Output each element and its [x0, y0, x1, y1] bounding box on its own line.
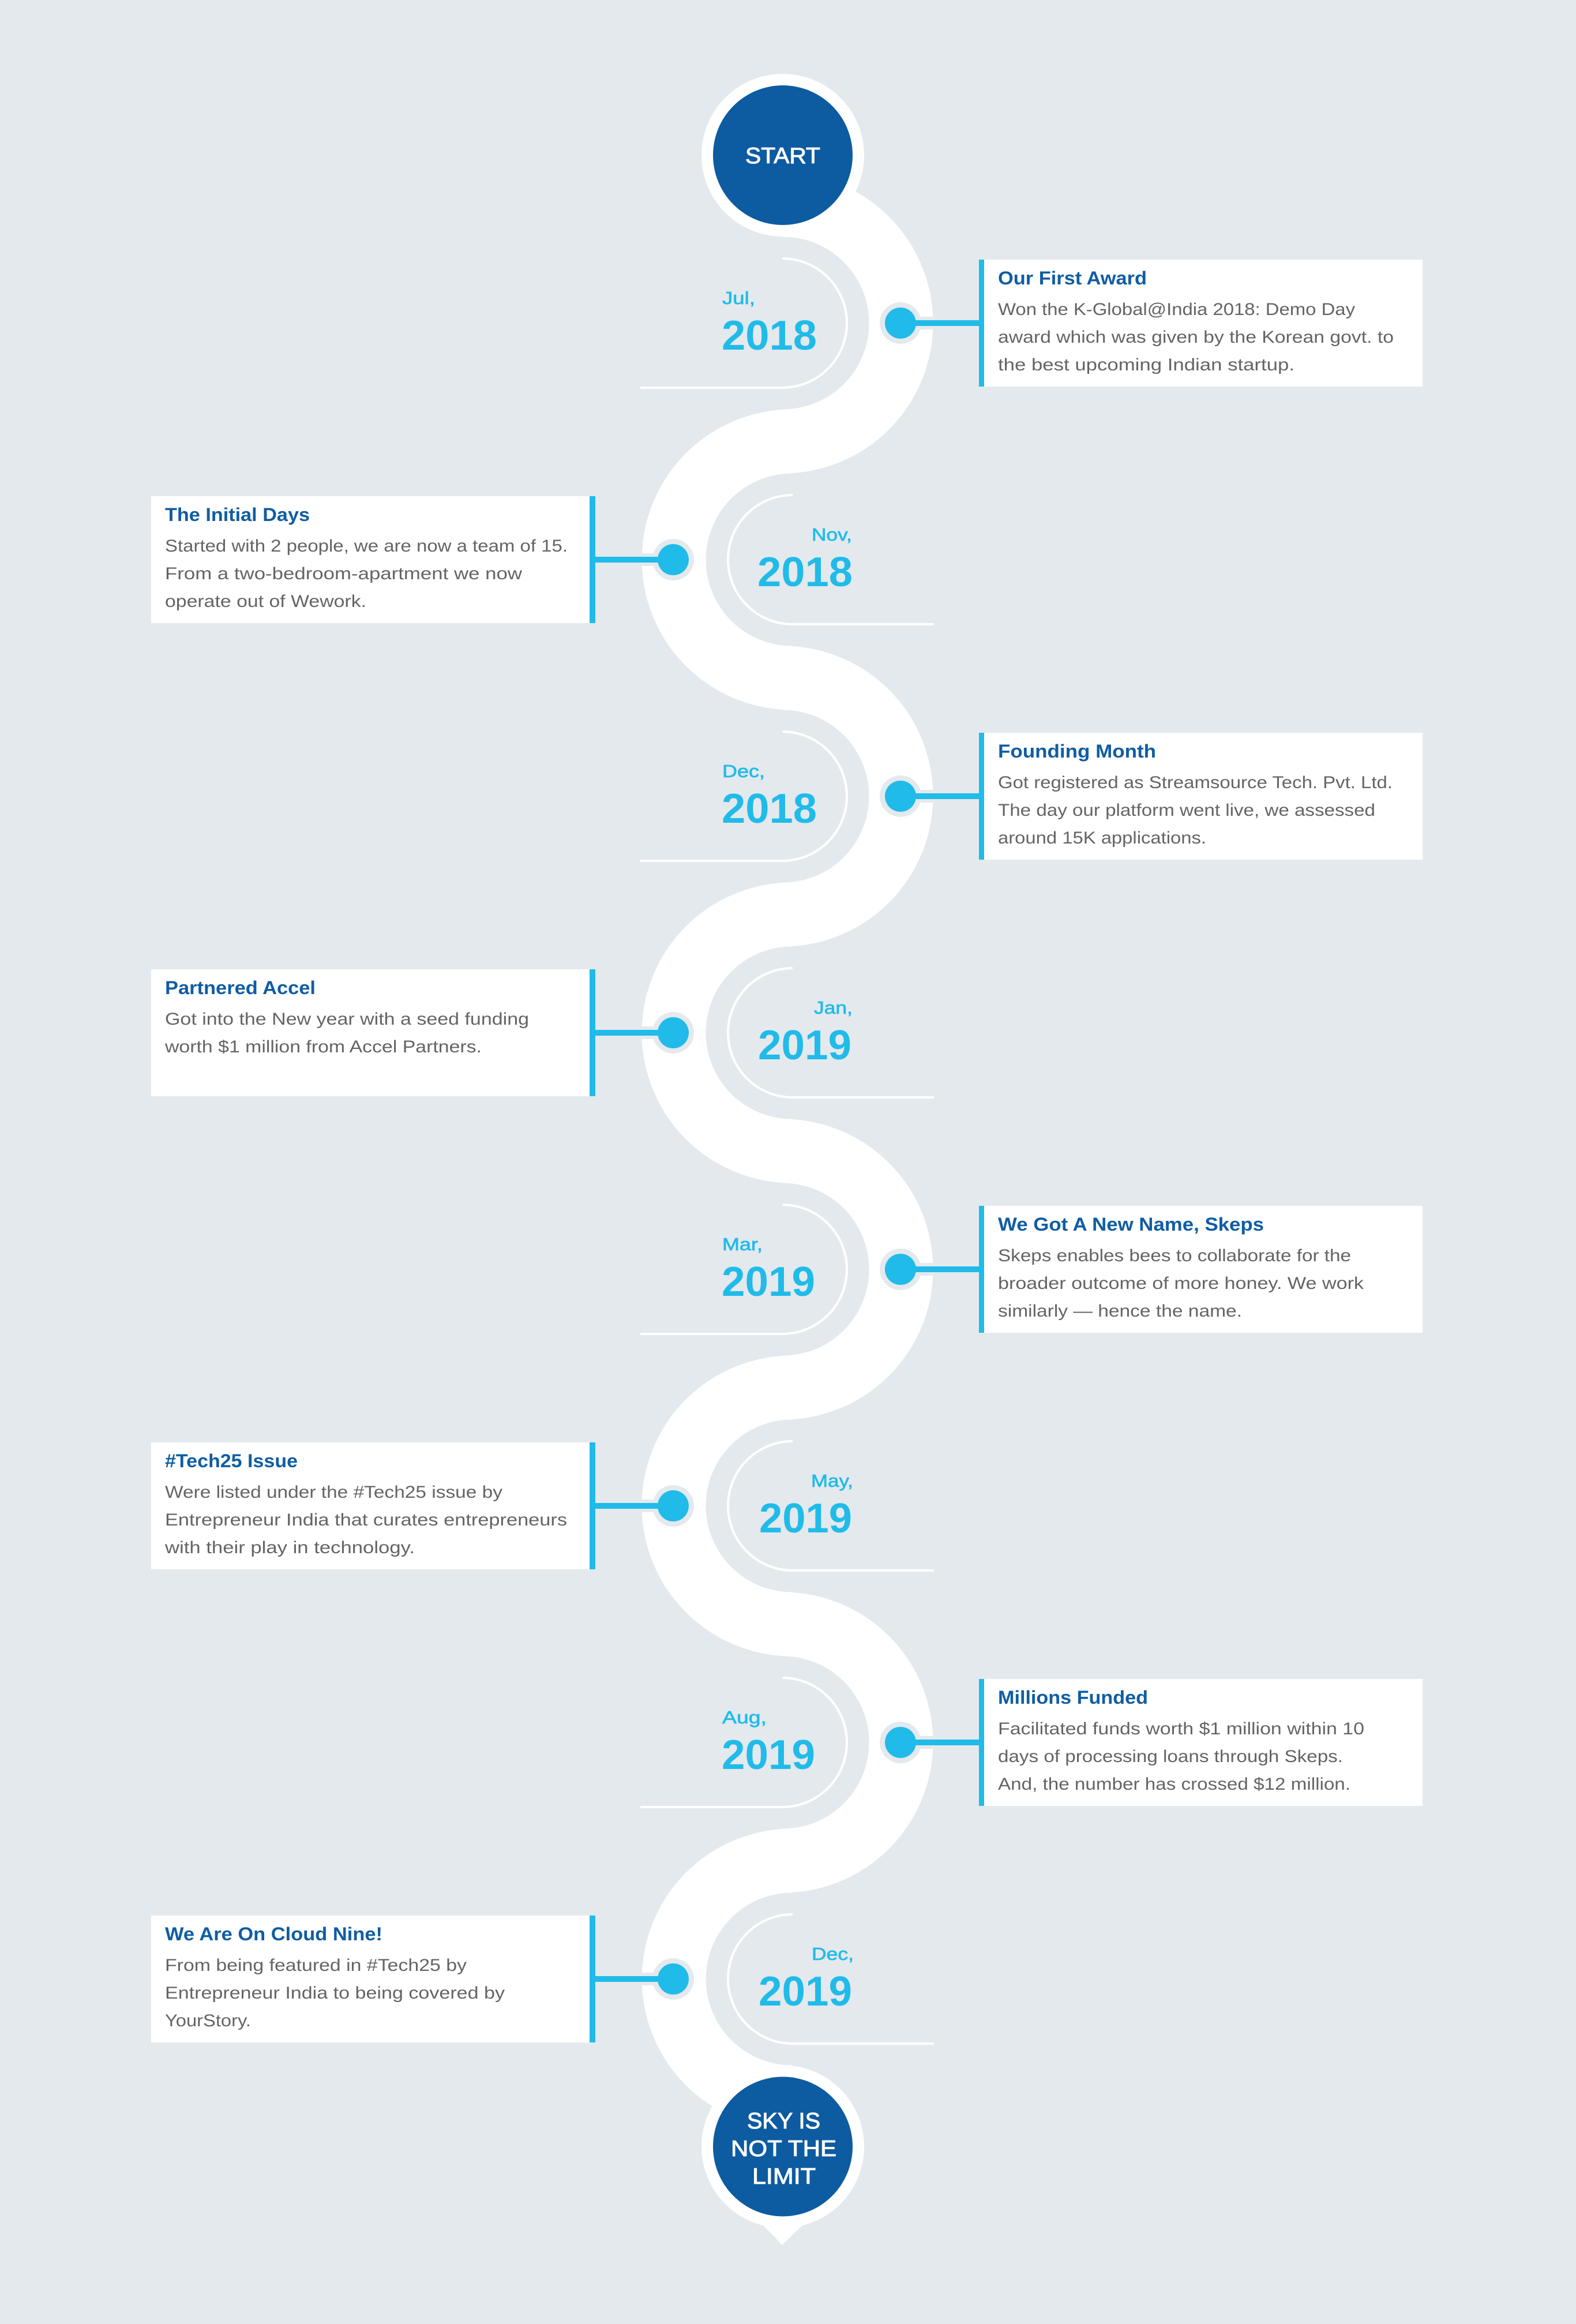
card: Millions Funded: Facilitated funds worth $1 million within 10	[998, 1719, 1364, 1738]
card: Partnered Accel: Got into the New year with a seed funding	[165, 1010, 529, 1029]
date: Nov, 2018: Nov,	[812, 524, 852, 545]
date: May, 2019	[759, 1471, 853, 1542]
dot and connector	[593, 1958, 694, 2000]
date: Jul, 2018: Jul,	[722, 288, 755, 308]
card: We Are On Cloud Nine!: YourStory.	[165, 2011, 251, 2030]
card: Our First Award: award which was given by the Korean govt. to	[998, 328, 1394, 347]
card: Partnered Accel: Partnered Accel	[165, 977, 316, 998]
date arc	[728, 1914, 934, 2044]
milestone 7: Aug 2019, Millions Funded	[640, 1678, 1423, 1807]
end node: pin with tail: SKY IS	[747, 2109, 820, 2134]
dot and connector	[880, 302, 981, 344]
date: Aug, 2019: Aug,	[722, 1707, 767, 1727]
card: We Are On Cloud Nine!: We Are On Cloud Nine!	[165, 1924, 382, 1944]
date: Jan, 2019: Jan,	[814, 998, 853, 1018]
card: The Initial Days	[151, 496, 595, 623]
card: Founding Month: Got registered as Streamsource Tech. Pvt. Ltd.	[998, 773, 1393, 792]
card: We Got A New Name, Skeps: Skeps enables bees to collaborate for the	[998, 1246, 1351, 1265]
dot and connector	[880, 1722, 981, 1763]
start node	[701, 74, 864, 237]
date: Nov, 2018	[757, 524, 853, 595]
card: #Tech25 Issue: #Tech25 Issue	[165, 1450, 298, 1471]
date: Dec, 2018	[722, 761, 817, 832]
milestone 8: Dec 2019, We Are On Cloud Nine	[151, 1914, 934, 2044]
end node: pin with tail	[701, 2066, 864, 2245]
date: Dec, 2019: Dec,	[812, 1944, 854, 1964]
dot and connector	[593, 539, 694, 580]
card: We Are On Cloud Nine!: Entrepreneur India to being covered by	[165, 1984, 505, 2003]
end node: pin with tail: LIMIT	[752, 2164, 816, 2189]
date arc	[640, 1205, 847, 1334]
card: Millions Funded: And, the number has crossed $12 million.	[998, 1775, 1350, 1794]
date arc	[640, 1678, 847, 1807]
date: Dec, 2018: 2018	[722, 786, 817, 832]
date: May, 2019: 2019	[759, 1495, 852, 1542]
date: Aug, 2019	[722, 1707, 815, 1778]
milestone 3: Dec 2018, Founding Month	[640, 732, 1423, 861]
card: #Tech25 Issue: Entrepreneur India that curates entrepreneurs	[165, 1510, 567, 1530]
date: Jul, 2018: 2018	[722, 313, 817, 359]
card: #Tech25 Issue	[151, 1442, 595, 1569]
date: Dec, 2018: Dec,	[722, 761, 765, 781]
card: #Tech25 Issue: with their play in technology.	[164, 1538, 415, 1557]
dot and connector	[593, 1012, 694, 1054]
card: The Initial Days: Started with 2 people, we are now a team of 15.	[165, 537, 568, 556]
date: Jan, 2019: 2019	[758, 1022, 851, 1069]
milestone 5: Mar 2019, We Got A New Name	[640, 1205, 1423, 1334]
date: Dec, 2019	[759, 1944, 854, 2015]
card: Millions Funded: Millions Funded	[998, 1687, 1148, 1708]
card: The Initial Days: operate out of Wework.	[165, 592, 366, 611]
date: Nov, 2018: 2018	[757, 549, 853, 595]
date arc	[640, 732, 847, 861]
date: Jul, 2018	[722, 288, 817, 359]
card: Founding Month: Founding Month	[998, 741, 1156, 762]
card: Millions Funded: days of processing loans through Skeps.	[998, 1747, 1343, 1766]
card: Our First Award	[979, 260, 1423, 387]
card: We Got A New Name, Skeps: similarly — hence the name.	[998, 1302, 1242, 1321]
card: We Got A New Name, Skeps: broader outcome of more honey. We work	[998, 1274, 1364, 1293]
card: Our First Award: the best upcoming Indian startup.	[998, 355, 1294, 374]
dot and connector	[880, 1249, 981, 1290]
date arc	[728, 1441, 934, 1570]
date arc	[728, 968, 934, 1097]
card: #Tech25 Issue: Were listed under the #Tech25 issue by	[165, 1483, 502, 1502]
date: Jan, 2019	[758, 998, 853, 1069]
start node: START	[745, 144, 820, 168]
milestone 1: Jul 2018, Our First Award	[640, 258, 1423, 388]
card: Partnered Accel	[151, 969, 595, 1096]
end node: pin with tail: NOT THE	[731, 2136, 836, 2161]
card: Founding Month: around 15K applications.	[998, 829, 1206, 848]
card: We Are On Cloud Nine!: From being featured in #Tech25 by	[165, 1956, 467, 1975]
card: Founding Month: The day our platform went live, we assessed	[998, 801, 1375, 820]
date: Mar, 2019: Mar,	[722, 1234, 763, 1254]
card: Our First Award: Our First Award	[998, 268, 1147, 288]
milestone 2: Nov 2018, The Initial Days	[151, 495, 934, 624]
dot and connector	[593, 1485, 694, 1527]
card: The Initial Days: The Initial Days	[165, 504, 310, 525]
card: The Initial Days: From a two-bedroom-apartment we now	[165, 564, 522, 583]
card: We Got A New Name, Skeps: We Got A New Name, Skeps	[998, 1214, 1264, 1235]
date arc	[728, 495, 934, 624]
card: Founding Month	[979, 733, 1423, 860]
date: Mar, 2019	[722, 1234, 815, 1305]
card: We Are On Cloud Nine!	[151, 1916, 595, 2042]
milestone 4: Jan 2019, Partnered Accel	[151, 968, 934, 1097]
date: Mar, 2019: 2019	[722, 1259, 815, 1305]
card: Millions Funded	[979, 1679, 1423, 1806]
winding white road	[674, 205, 901, 2097]
dot and connector	[880, 775, 981, 817]
card: Our First Award: Won the K-Global@India 2018: Demo Day	[998, 300, 1355, 319]
card: We Got A New Name, Skeps	[979, 1206, 1423, 1333]
date: May, 2019: May,	[811, 1471, 853, 1491]
milestone 6: May 2019, #Tech25 Issue	[151, 1441, 934, 1570]
date arc	[640, 258, 847, 388]
card: Partnered Accel: worth $1 million from Accel Partners.	[164, 1037, 482, 1056]
date: Aug, 2019: 2019	[722, 1732, 815, 1778]
date: Dec, 2019: 2019	[759, 1969, 852, 2015]
